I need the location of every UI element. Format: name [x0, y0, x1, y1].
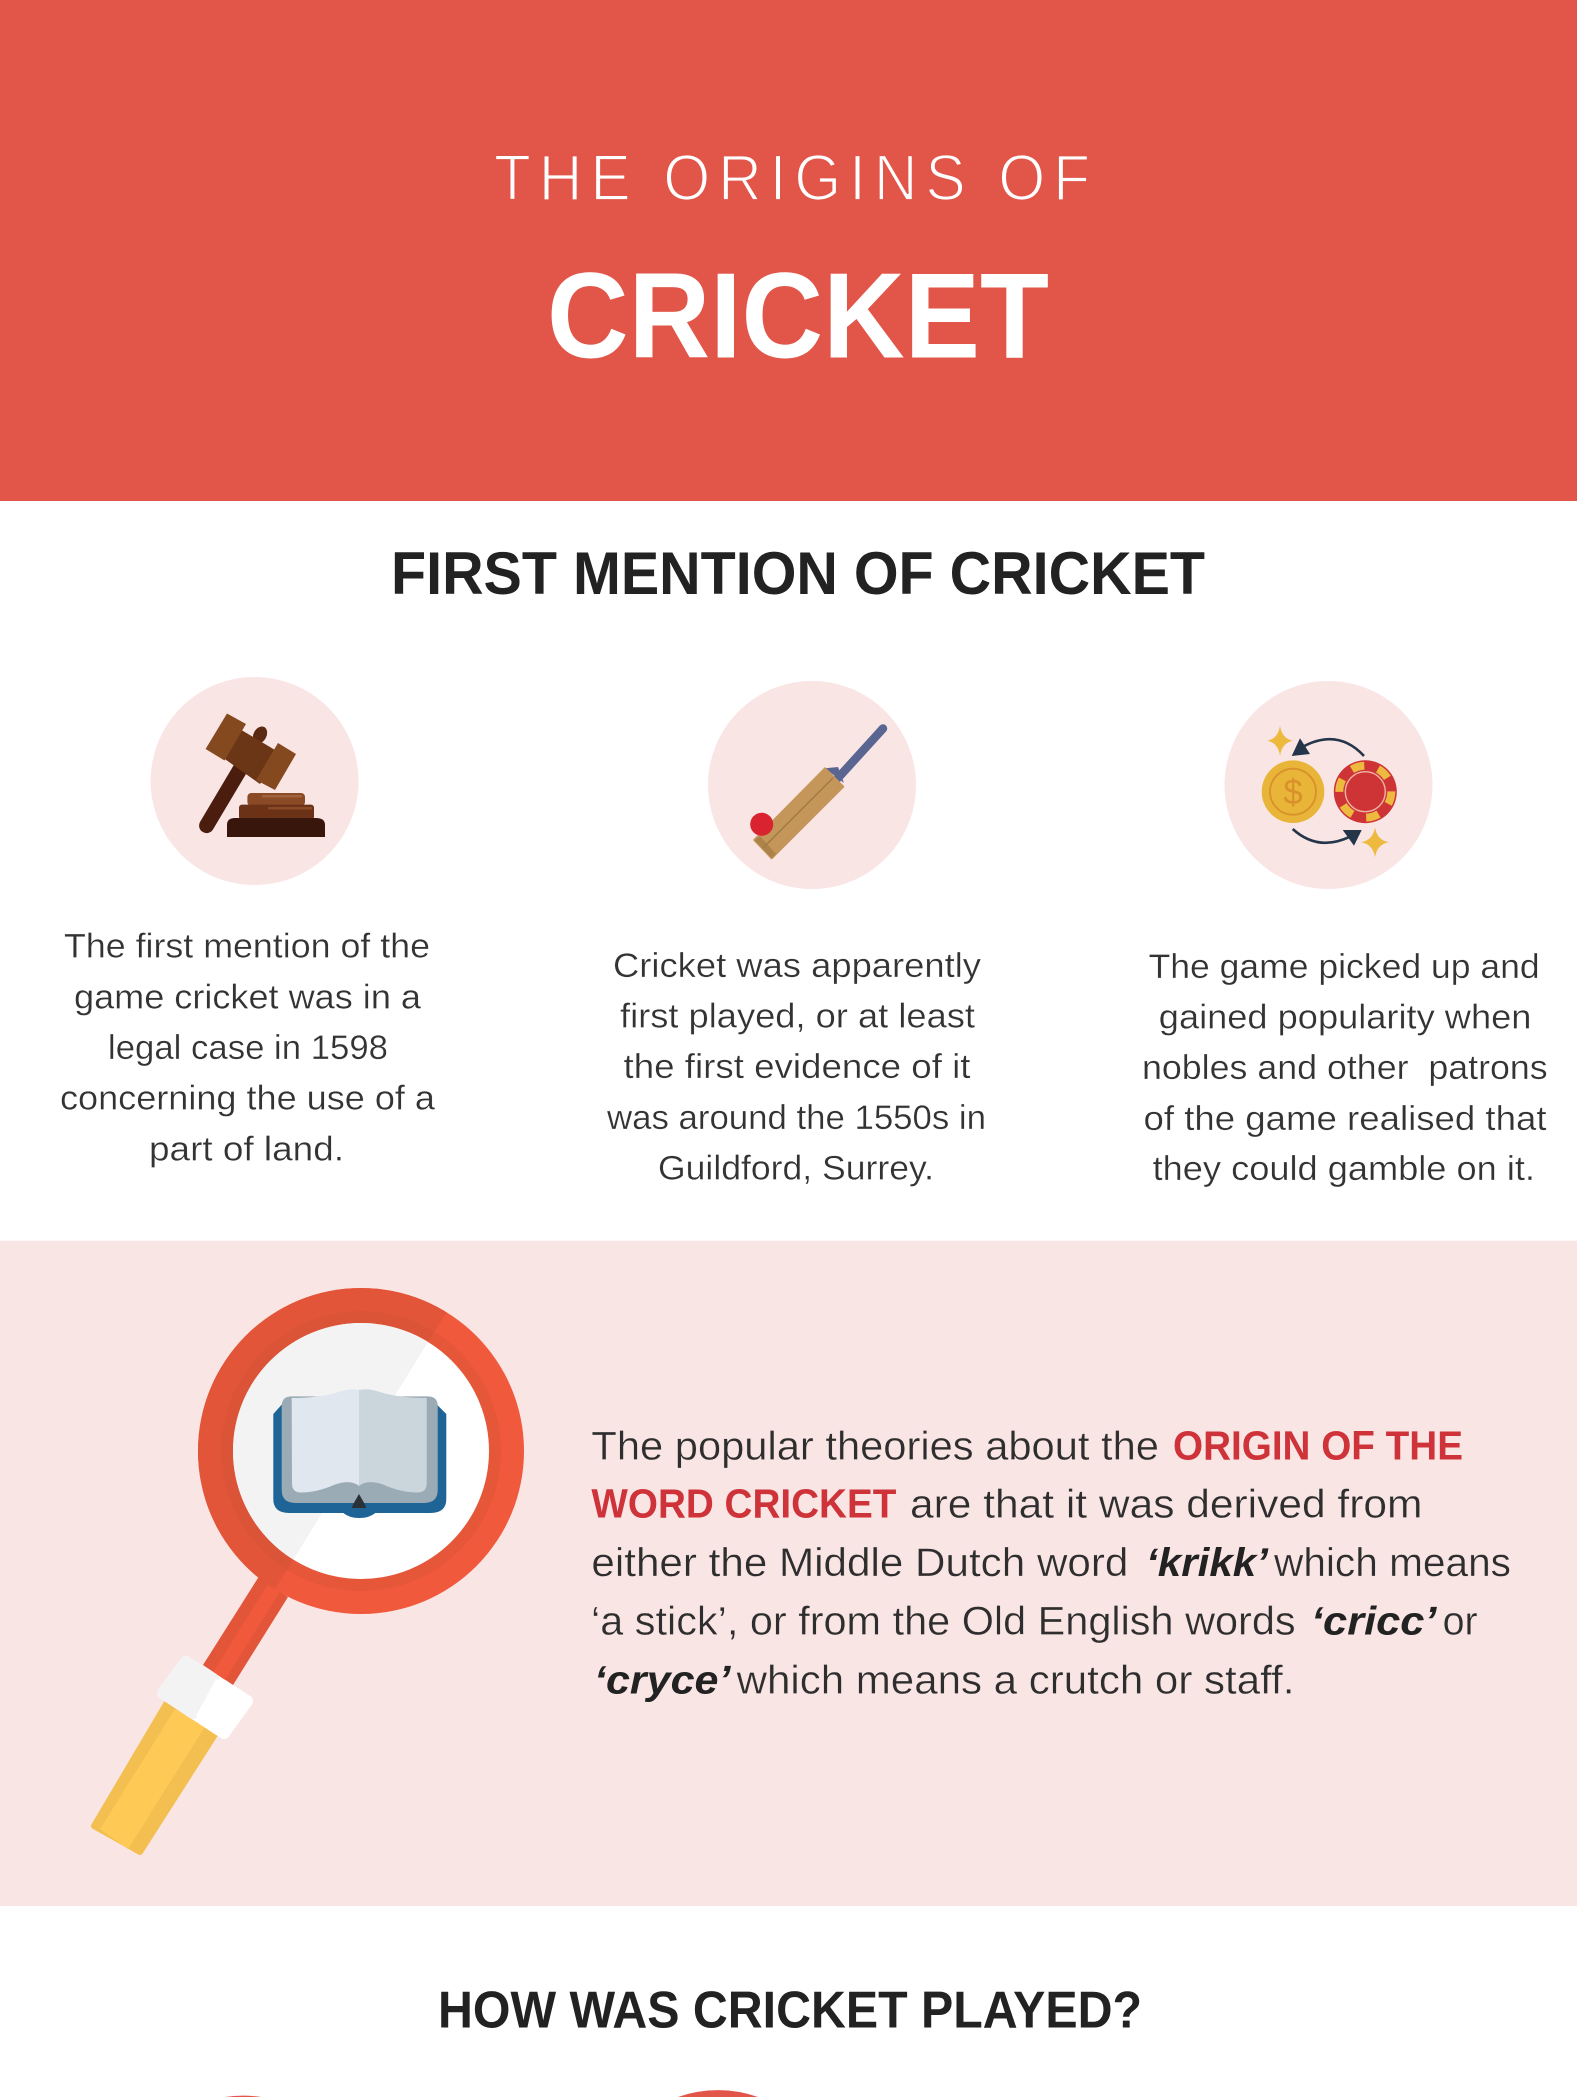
text: word origin: ‘krikk’	[1146, 1541, 1269, 1585]
text: legal case: game cricket was in a	[74, 978, 421, 1016]
text: bat: first played, or at least	[620, 998, 976, 1036]
icon: open book	[273, 1389, 446, 1518]
column: legal case	[60, 677, 435, 1168]
text: legal case: part of land.	[149, 1130, 344, 1168]
text: word origin: ORIGIN OF THE	[1173, 1422, 1463, 1468]
column: gambling	[1142, 681, 1548, 1188]
text: bat: Cricket was apparently	[613, 947, 981, 985]
icon: coin and chip	[1224, 681, 1432, 889]
text: gambling: of the game realised that	[1144, 1100, 1547, 1138]
text: bat: was around the 1550s in	[606, 1099, 986, 1137]
arrow: coin to chip	[1293, 829, 1362, 846]
text: gambling: gained popularity when	[1159, 998, 1531, 1036]
text: word origin: which means	[1273, 1541, 1511, 1585]
header banner	[0, 0, 1577, 501]
text: word origin: are that it was derived from	[910, 1483, 1422, 1527]
text: legal case: The first mention of the	[64, 928, 430, 966]
magnifier handle	[94, 1578, 288, 1852]
icon: gold coin	[1262, 760, 1324, 823]
title: the origins of: THE ORIGINS OF	[494, 142, 1090, 214]
text: word origin	[591, 1422, 1511, 1702]
text: gambling	[1142, 948, 1548, 1188]
panel: word origin	[0, 1241, 1577, 1906]
text: bat: the first evidence of it	[624, 1048, 971, 1086]
text: word origin: or	[1443, 1600, 1478, 1644]
column: bat	[606, 681, 986, 1188]
icon: gold coin: $	[1283, 773, 1303, 812]
text: word origin: ‘cryce’	[594, 1658, 731, 1702]
icon: cricket bat and ball	[708, 681, 916, 889]
text: bat: Guildford, Surrey.	[658, 1150, 934, 1188]
icon: gavel	[151, 677, 359, 885]
text: gambling: they could gamble on it.	[1153, 1150, 1535, 1188]
magnifier ring and lens	[198, 1288, 524, 1614]
text: word origin: WORD CRICKET	[591, 1481, 896, 1527]
icon: sparkles	[1267, 726, 1389, 857]
text: legal case	[60, 928, 435, 1168]
icon: casino chip	[1330, 756, 1401, 827]
text: word origin: The popular theories about the	[591, 1424, 1159, 1468]
text: gambling: The game picked up and	[1149, 948, 1540, 986]
heading: first mention of cricket: FIRST MENTION OF CRICKET	[391, 539, 1205, 607]
text: word origin: ‘cricc’	[1311, 1600, 1437, 1644]
text: bat	[606, 947, 986, 1188]
circles cut off at bottom edge	[225, 2090, 758, 2097]
text: word origin: which means a crutch or staff.	[736, 1658, 1294, 1702]
text: legal case: concerning the use of a	[60, 1080, 435, 1118]
text: word origin: ‘a stick’, or from the Old English words	[591, 1600, 1296, 1644]
title: cricket: CRICKET	[547, 248, 1049, 384]
text: legal case: legal case in 1598	[108, 1029, 388, 1067]
text: gambling: nobles and other patrons	[1142, 1049, 1548, 1087]
arrow: chip to coin	[1292, 738, 1364, 756]
text: word origin: either the Middle Dutch word	[591, 1541, 1128, 1585]
icon: magnifying glass with book	[94, 1288, 524, 1852]
heading: how was cricket played: HOW WAS CRICKET PLAYED?	[438, 1981, 1142, 2039]
